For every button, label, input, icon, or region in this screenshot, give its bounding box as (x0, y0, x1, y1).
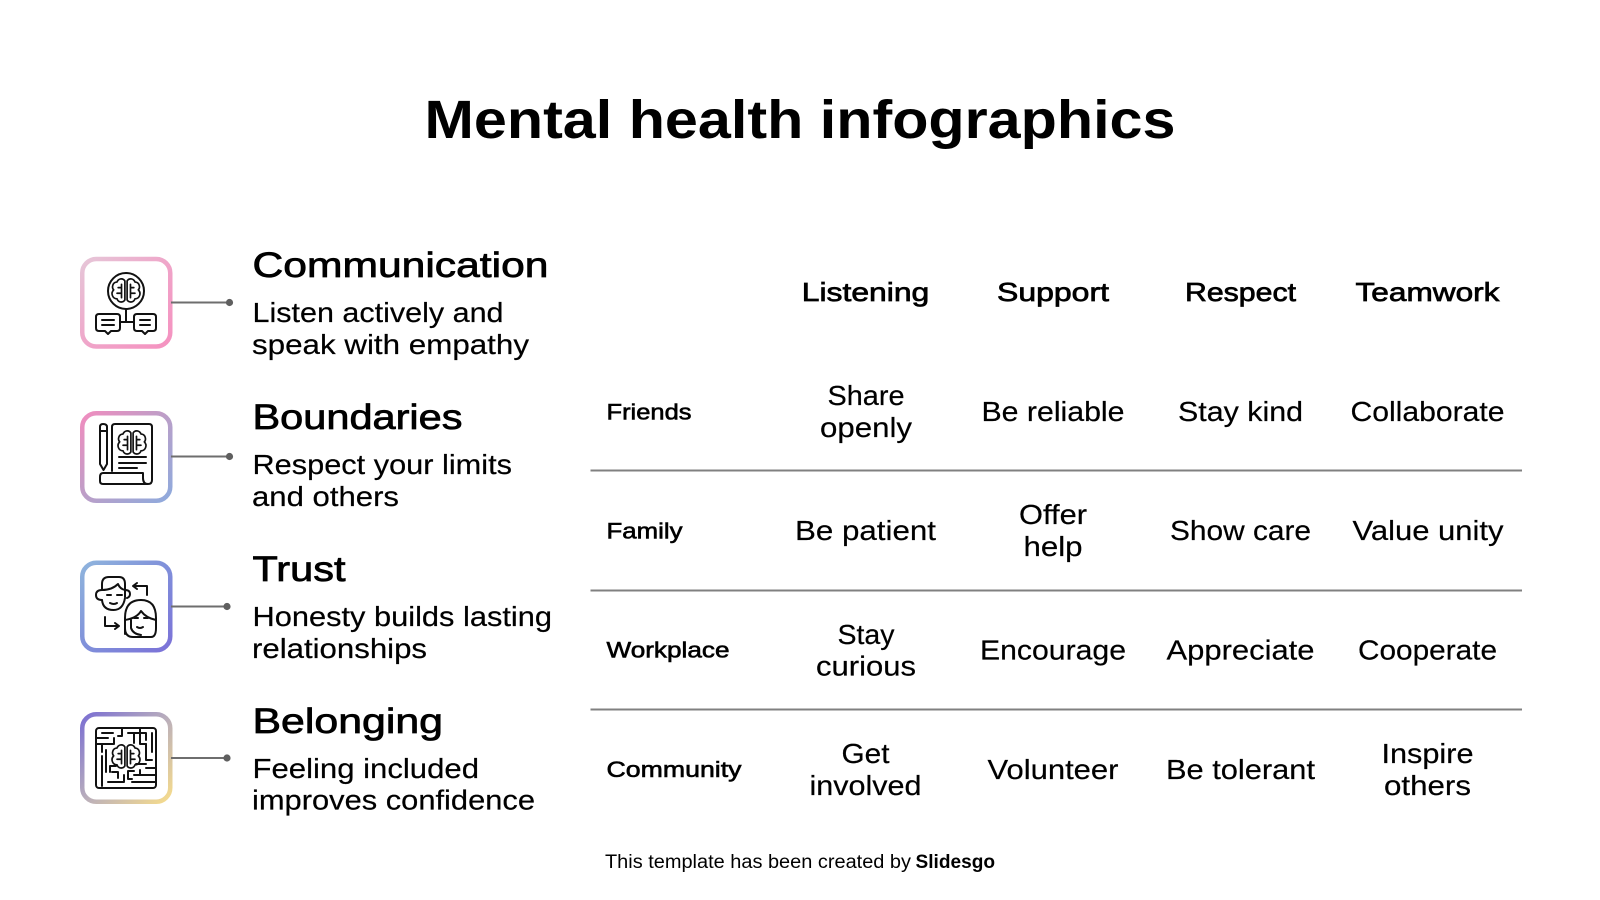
footer credit: Slidesgo (916, 852, 995, 873)
title: Mental health infographics (424, 90, 1176, 150)
row: community (606, 738, 1474, 801)
description: Honesty builds lasting (252, 601, 552, 632)
description: Listen actively and (252, 297, 504, 328)
table (590, 277, 1522, 801)
row: friends: Friends (606, 400, 692, 424)
row: community: involved (810, 770, 922, 801)
row: workplace: Workplace (606, 638, 730, 662)
table header row: Support (997, 277, 1110, 307)
table header row (802, 277, 1501, 307)
description (252, 449, 512, 512)
row: workplace: Stay (838, 619, 894, 650)
table header row: Respect (1185, 277, 1297, 307)
footer credit: This template has been created by (605, 852, 912, 873)
description (252, 297, 529, 360)
row: friends: Stay kind (1178, 396, 1303, 427)
connector (171, 299, 233, 306)
table header row: Listening (802, 277, 929, 307)
description: Respect your limits (252, 449, 512, 480)
row: workplace (606, 619, 1497, 682)
panel: boundaries (82, 398, 512, 512)
icon card: brain document and pencil (82, 413, 170, 501)
row: community: Inspire (1382, 738, 1474, 769)
row: friends: openly (820, 412, 912, 443)
description: improves confidence (252, 784, 535, 816)
row: family: Be patient (795, 515, 936, 546)
description: relationships (252, 633, 427, 664)
connector (171, 754, 231, 762)
row: friends: Be reliable (982, 396, 1124, 427)
heading: Trust (252, 550, 346, 589)
row: workplace: Encourage (980, 634, 1126, 666)
heading: Belonging (252, 702, 443, 741)
table header row: Teamwork (1356, 277, 1501, 307)
row: friends: Share (828, 380, 904, 411)
row: community: Be tolerant (1166, 754, 1315, 785)
row: workplace: Appreciate (1166, 634, 1314, 666)
icon card: brain maze (82, 714, 170, 802)
row: family: Value unity (1352, 515, 1504, 546)
row: workplace: Cooperate (1358, 634, 1497, 666)
row: community: Get (842, 738, 890, 769)
row: friends (606, 380, 1504, 443)
description (252, 601, 552, 664)
connector (171, 453, 233, 460)
description: and others (252, 481, 399, 512)
description: speak with empathy (252, 329, 529, 360)
row: community: Community (606, 757, 742, 782)
row: family: Family (606, 518, 683, 544)
panel: trust (82, 550, 552, 664)
row: community: others (1384, 770, 1471, 801)
row: family: help (1024, 531, 1082, 562)
row: friends: Collaborate (1350, 396, 1504, 427)
icon card: two faces exchanging (82, 563, 170, 650)
row: family: Show care (1170, 515, 1311, 546)
row: family: Offer (1019, 499, 1087, 530)
heading: Communication (252, 246, 548, 285)
connector (171, 603, 231, 610)
row: family (606, 499, 1504, 562)
heading: Boundaries (252, 398, 462, 437)
description (252, 753, 535, 816)
panel: communication (82, 246, 548, 360)
row: workplace: curious (816, 650, 916, 682)
icon card: brain with speech bubbles (82, 259, 170, 346)
row: community: Volunteer (988, 754, 1118, 785)
panel: belonging (82, 702, 535, 816)
description: Feeling included (252, 753, 479, 784)
